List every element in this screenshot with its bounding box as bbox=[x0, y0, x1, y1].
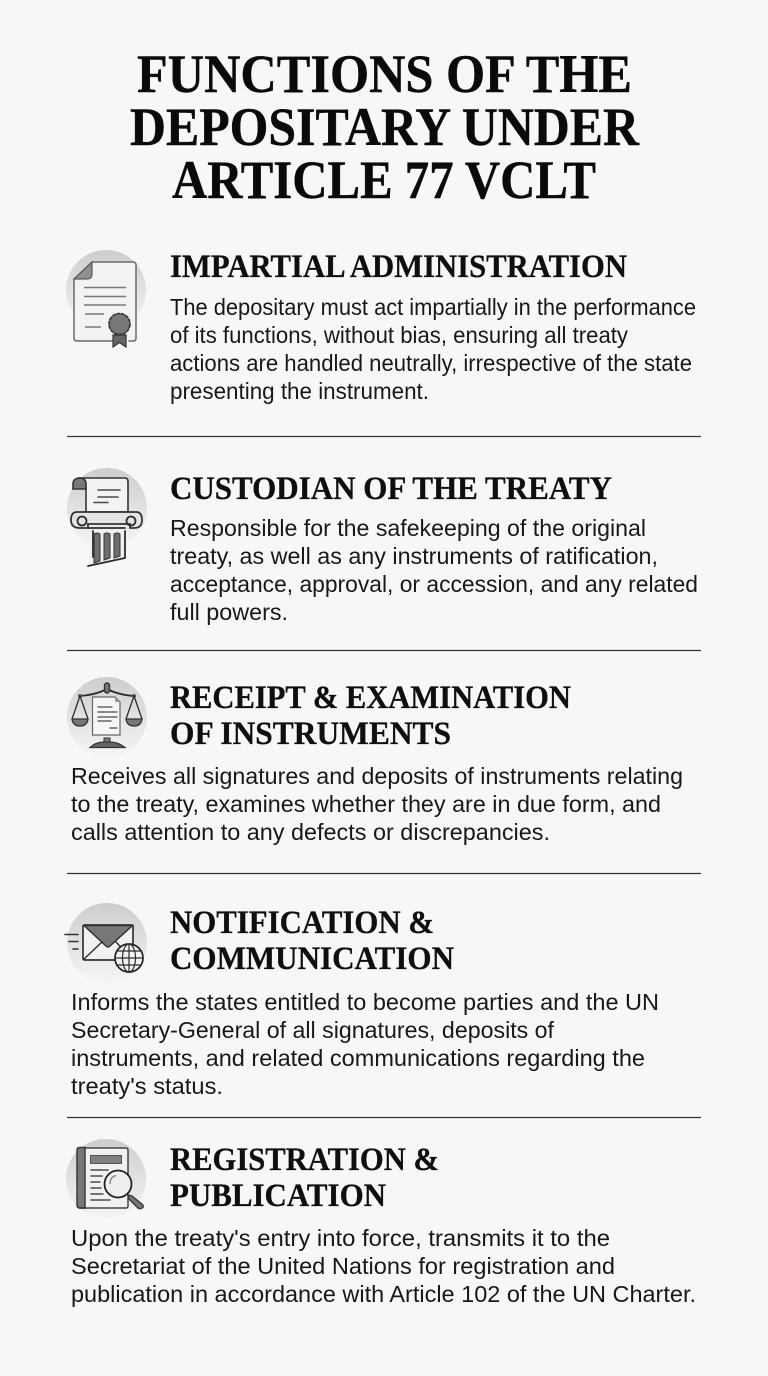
panel: receipt and examination bbox=[67, 677, 683, 845]
heading: IMPARTIAL ADMINISTRATION bbox=[170, 249, 627, 285]
body text: The depositary must act impartially in the performance bbox=[170, 294, 696, 320]
body text: of its functions, without bias, ensuring all treaty bbox=[170, 322, 628, 348]
body text: publication in accordance with Article 102 of the UN Charter. bbox=[71, 1281, 696, 1307]
heading: CUSTODIAN OF THE TREATY bbox=[170, 471, 612, 507]
body text bbox=[71, 989, 659, 1099]
body text bbox=[71, 1225, 696, 1307]
heading: RECEIPT & EXAMINATION bbox=[170, 680, 571, 716]
body text: actions are handled neutrally, irrespective of the state bbox=[170, 350, 692, 376]
heading bbox=[170, 905, 454, 977]
panel: impartial administration bbox=[66, 249, 696, 404]
body text: Upon the treaty's entry into force, transmits it to the bbox=[71, 1225, 610, 1251]
heading: REGISTRATION & bbox=[170, 1142, 439, 1178]
body text: presenting the instrument. bbox=[170, 378, 429, 404]
icon: scales with document bbox=[67, 677, 147, 757]
panel: notification and communication bbox=[65, 903, 659, 1099]
icon: envelope and globe bbox=[65, 903, 147, 983]
body text bbox=[170, 515, 698, 625]
heading: OF INSTRUMENTS bbox=[170, 716, 451, 752]
body text: Informs the states entitled to become parties and the UN bbox=[71, 989, 659, 1015]
panel: custodian of the treaty bbox=[67, 468, 698, 625]
body text: Secretary-General of all signatures, deposits of bbox=[71, 1017, 554, 1043]
title bbox=[130, 44, 640, 210]
body text bbox=[71, 763, 683, 845]
body text: Secretariat of the United Nations for registration and bbox=[71, 1253, 615, 1279]
heading: NOTIFICATION & bbox=[170, 905, 434, 941]
body text: treaty, as well as any instruments of ratification, bbox=[170, 543, 658, 569]
panel: registration and publication bbox=[66, 1139, 696, 1307]
heading: PUBLICATION bbox=[170, 1178, 386, 1214]
body text: to the treaty, examines whether they are in due form, and bbox=[71, 791, 661, 817]
body text: Responsible for the safekeeping of the original bbox=[170, 515, 646, 541]
heading bbox=[170, 1142, 439, 1214]
body text: full powers. bbox=[170, 599, 288, 625]
title: ARTICLE 77 VCLT bbox=[172, 150, 596, 210]
body text: acceptance, approval, or accession, and any related bbox=[170, 571, 698, 597]
body text: instruments, and related communications regarding the bbox=[71, 1045, 645, 1071]
heading bbox=[170, 680, 571, 752]
body text: treaty's status. bbox=[71, 1073, 223, 1099]
icon: certificate document with seal bbox=[66, 250, 146, 347]
icon: book with magnifying glass bbox=[66, 1139, 146, 1219]
body text: calls attention to any defects or discrepancies. bbox=[71, 819, 550, 845]
body text bbox=[170, 294, 696, 404]
title: FUNCTIONS OF THE bbox=[137, 44, 632, 104]
icon: scroll on column bbox=[67, 468, 147, 566]
heading: COMMUNICATION bbox=[170, 941, 454, 977]
body text: Receives all signatures and deposits of instruments relating bbox=[71, 763, 683, 789]
title: DEPOSITARY UNDER bbox=[130, 97, 640, 157]
